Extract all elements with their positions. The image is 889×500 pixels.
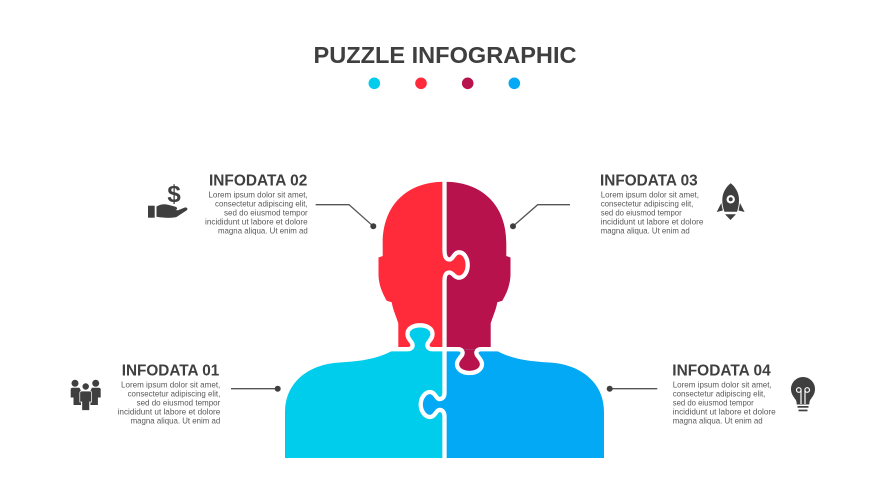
body text: sed do eiusmod tempor [224, 208, 308, 218]
body text [673, 379, 776, 426]
body text: consectetur adipiscing elit, [128, 388, 220, 398]
piece: head right crimson [446, 182, 510, 350]
body text: Lorem ipsum dolor sit amet, [208, 189, 308, 199]
panel: infodata 03 [510, 173, 745, 236]
body text: magna aliqua. Ut enim ad [131, 416, 220, 426]
leader line [316, 205, 376, 229]
icon: rocket [717, 183, 745, 220]
piece: shoulders left cyan [285, 349, 442, 458]
body text: incididunt ut labore et dolore [673, 407, 776, 417]
heading: INFODATA 03 [600, 173, 698, 190]
body text: magna aliqua. Ut enim ad [673, 416, 763, 426]
body text: consectetur adipiscing elit, [673, 388, 765, 398]
tab: blue into cyan [421, 392, 444, 417]
icon: group of people [71, 380, 101, 410]
heading: INFODATA 04 [672, 363, 771, 380]
title colour dots [368, 78, 520, 89]
piece: head left red [378, 182, 444, 350]
body text: consectetur adipiscing elit, [601, 198, 693, 208]
body text: Lorem ipsum dolor sit amet, [601, 189, 699, 199]
body text: sed do eiusmod tempor [137, 398, 220, 408]
title: PUZZLE INFOGRAPHIC [314, 42, 577, 68]
body text: sed do eiusmod tempor [601, 208, 682, 218]
piece: shoulders right blue [444, 349, 604, 458]
body text: magna aliqua. Ut enim ad [601, 226, 690, 236]
body text [118, 379, 220, 426]
heading: INFODATA 02 [209, 173, 307, 190]
body text: Lorem ipsum dolor sit amet, [673, 379, 772, 389]
tab: red into crimson [444, 250, 468, 281]
puzzle head and shoulders figure [285, 178, 604, 462]
icon: hand holding dollar: $ [167, 181, 181, 208]
body text: incididunt ut labore et dolore [205, 217, 308, 227]
body text: consectetur adipiscing elit, [215, 198, 308, 208]
panel: infodata 01 [71, 363, 281, 426]
leader line [510, 205, 570, 229]
heading: INFODATA 01 [122, 363, 220, 380]
body text: incididunt ut labore et dolore [118, 407, 220, 417]
body text: incididunt ut labore et dolore [601, 217, 704, 227]
panel: infodata 02 [148, 173, 376, 236]
body text: magna aliqua. Ut enim ad [218, 226, 308, 236]
body text [205, 189, 308, 236]
body text [601, 189, 704, 236]
body text: sed do eiusmod tempor [673, 398, 754, 408]
leader line [231, 386, 281, 392]
white puzzle seams [388, 178, 501, 462]
tab: cyan into red [408, 325, 432, 349]
icon: hand holding dollar [148, 181, 187, 218]
tab: crimson into blue [457, 349, 482, 373]
panel: infodata 04 [607, 363, 815, 426]
body text: Lorem ipsum dolor sit amet, [121, 379, 220, 389]
leader line [607, 386, 657, 392]
icon: light bulb [791, 377, 815, 411]
